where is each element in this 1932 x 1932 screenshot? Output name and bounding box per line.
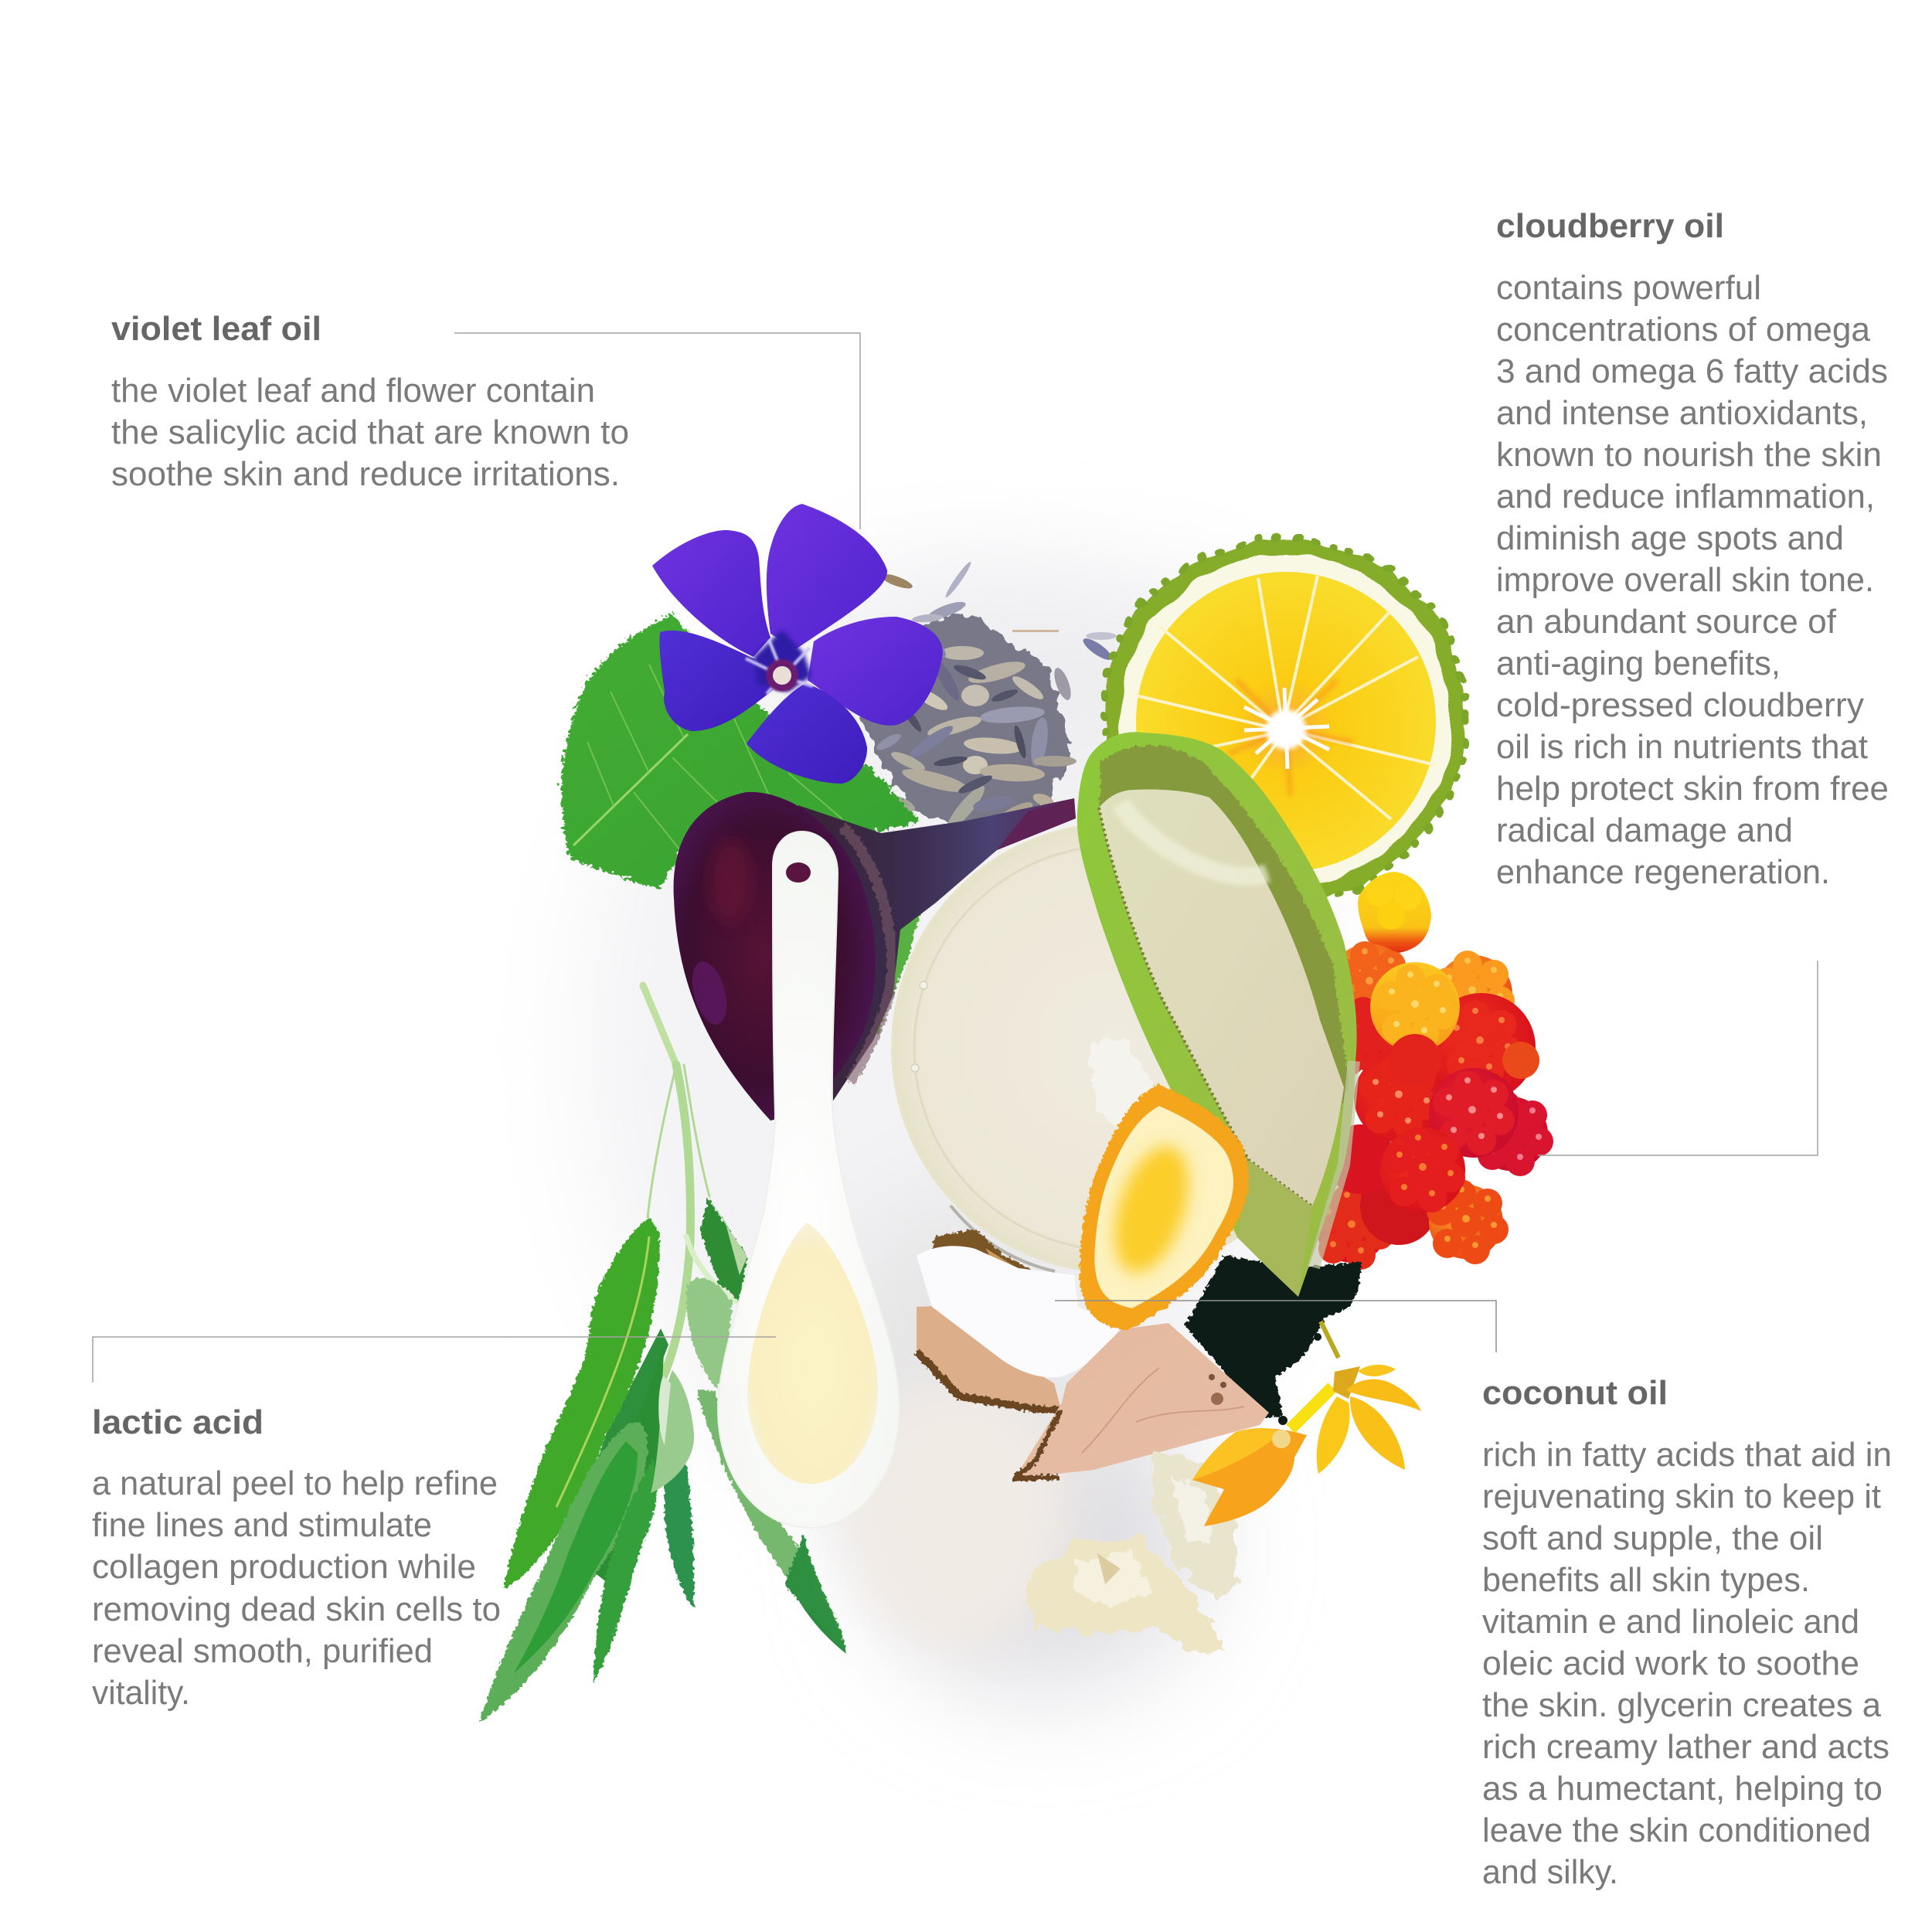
- coconut: white flesh: [917, 1246, 1121, 1377]
- icon: sage sprig: [479, 985, 846, 1723]
- body: violet leaf oil: the salicylic acid that are known to: [111, 413, 629, 451]
- text block: lactic acid: [92, 1403, 501, 1712]
- body: violet leaf oil: the violet leaf and flower contain: [111, 372, 595, 410]
- body: coconut oil: rich in fatty acids that aid in: [1482, 1436, 1892, 1474]
- flower stem: [1321, 1321, 1338, 1358]
- soft shadow backdrop: [587, 564, 1314, 1692]
- coconut: right shell: [1015, 1323, 1269, 1478]
- body: coconut oil: soft and supple, the oil: [1482, 1519, 1823, 1557]
- body: coconut oil: benefits all skin types.: [1482, 1561, 1810, 1599]
- body: coconut oil: rich creamy lather and acts: [1482, 1728, 1889, 1766]
- orange bloom: [1192, 1428, 1307, 1526]
- body: lactic acid: reveal smooth, purified: [92, 1632, 433, 1670]
- icon: sugar pile: [850, 1383, 1066, 1646]
- body: cloudberry oil: concentrations of omega: [1496, 311, 1871, 349]
- icon: lavender buds: [857, 560, 1117, 833]
- body: lactic acid: [92, 1464, 501, 1712]
- icon: white spoon with oil: [718, 832, 900, 1528]
- body: lactic acid: removing dead skin cells to: [92, 1590, 501, 1628]
- body: cloudberry oil: improve overall skin tone.: [1496, 561, 1874, 599]
- heading: violet leaf oil: violet leaf oil: [111, 310, 321, 348]
- petal: right: [808, 617, 943, 726]
- petal: upper left: [652, 530, 770, 657]
- body: coconut oil: [1482, 1436, 1892, 1891]
- body: lactic acid: vitality.: [92, 1674, 190, 1712]
- beet root body: [798, 798, 1076, 1107]
- body: violet leaf oil: [111, 372, 629, 493]
- text block: cloudberry oil: [1496, 207, 1889, 891]
- coconut: brown husk: [931, 1229, 1036, 1283]
- beet cut face: [674, 792, 876, 1121]
- icon: cloudberries: [1312, 872, 1553, 1270]
- body: cloudberry oil: oil is rich in nutrients that: [1496, 728, 1868, 766]
- icon: green leaf scrap behind beet: [873, 899, 924, 1036]
- body: coconut oil: and silky.: [1482, 1853, 1618, 1891]
- body: cloudberry oil: an abundant source of: [1496, 603, 1837, 641]
- icon: aloe vera leaf: [1077, 732, 1357, 1297]
- text block: coconut oil: [1482, 1374, 1892, 1891]
- body: cloudberry oil: contains powerful: [1496, 269, 1761, 307]
- petal: bottom: [747, 683, 867, 784]
- connector: lactic acid: [93, 1337, 776, 1383]
- text block: violet leaf oil: [111, 310, 629, 493]
- body: coconut oil: oleic acid work to soothe: [1482, 1645, 1859, 1682]
- icon: resin chunks: [1027, 1451, 1236, 1656]
- berry cluster: [1312, 941, 1553, 1270]
- body: coconut oil: as a humectant, helping to: [1482, 1770, 1883, 1808]
- icon: black charcoal powder: [1185, 1256, 1362, 1425]
- heading: coconut oil: coconut oil: [1482, 1374, 1668, 1412]
- body: cloudberry oil: enhance regeneration.: [1496, 853, 1830, 891]
- body: violet leaf oil: soothe skin and reduce irritations.: [111, 455, 620, 493]
- body: coconut oil: the skin. glycerin creates a: [1482, 1686, 1882, 1724]
- body: coconut oil: rejuvenating skin to keep it: [1482, 1478, 1881, 1515]
- body: cloudberry oil: help protect skin from free: [1496, 770, 1889, 808]
- icon: glass jar of oil: [893, 824, 1341, 1272]
- body: cloudberry oil: radical damage and: [1496, 811, 1793, 849]
- body: cloudberry oil: and reduce inflammation,: [1496, 478, 1875, 515]
- body: cloudberry oil: anti-aging benefits,: [1496, 645, 1781, 682]
- coconut: left shell: [917, 1306, 1060, 1410]
- body: coconut oil: vitamin e and linoleic and: [1482, 1603, 1859, 1641]
- body: cloudberry oil: cold-pressed cloudberry: [1496, 686, 1864, 724]
- connector: violet leaf oil: [454, 333, 860, 529]
- icon: coconut pieces: [917, 1229, 1269, 1478]
- connector: coconut oil: [1055, 1301, 1496, 1352]
- body: cloudberry oil: [1496, 269, 1889, 891]
- heading: lactic acid: lactic acid: [92, 1403, 264, 1441]
- body: cloudberry oil: known to nourish the skin: [1496, 436, 1882, 474]
- icon: yellow flowers: [1192, 1321, 1421, 1526]
- sage stems: [643, 985, 738, 1391]
- body: coconut oil: leave the skin conditioned: [1482, 1811, 1871, 1849]
- body: cloudberry oil: and intense antioxidants,: [1496, 394, 1868, 432]
- icon: citrus wedge: [1080, 1084, 1249, 1331]
- flower centre: [746, 630, 813, 694]
- body: lactic acid: collagen production while: [92, 1548, 476, 1586]
- body: lactic acid: a natural peel to help refine: [92, 1464, 498, 1502]
- body: cloudberry oil: 3 and omega 6 fatty acids: [1496, 352, 1888, 390]
- icon: green serrated leaf: [558, 611, 917, 885]
- yellow bloom: [1333, 1366, 1360, 1399]
- connector: cloudberry oil: [1538, 961, 1818, 1155]
- petal: left lower: [659, 631, 773, 731]
- heading: cloudberry oil: cloudberry oil: [1496, 207, 1724, 245]
- icon: purple beet: [674, 792, 1076, 1121]
- icon: citrus slice: [1102, 538, 1467, 903]
- berry: yellow top: [1358, 872, 1431, 953]
- body: lactic acid: fine lines and stimulate: [92, 1506, 432, 1544]
- sage leaves: [587, 1328, 668, 1492]
- icon: violet flower: [652, 504, 943, 784]
- petal: top: [767, 504, 887, 649]
- body: cloudberry oil: diminish age spots and: [1496, 519, 1844, 557]
